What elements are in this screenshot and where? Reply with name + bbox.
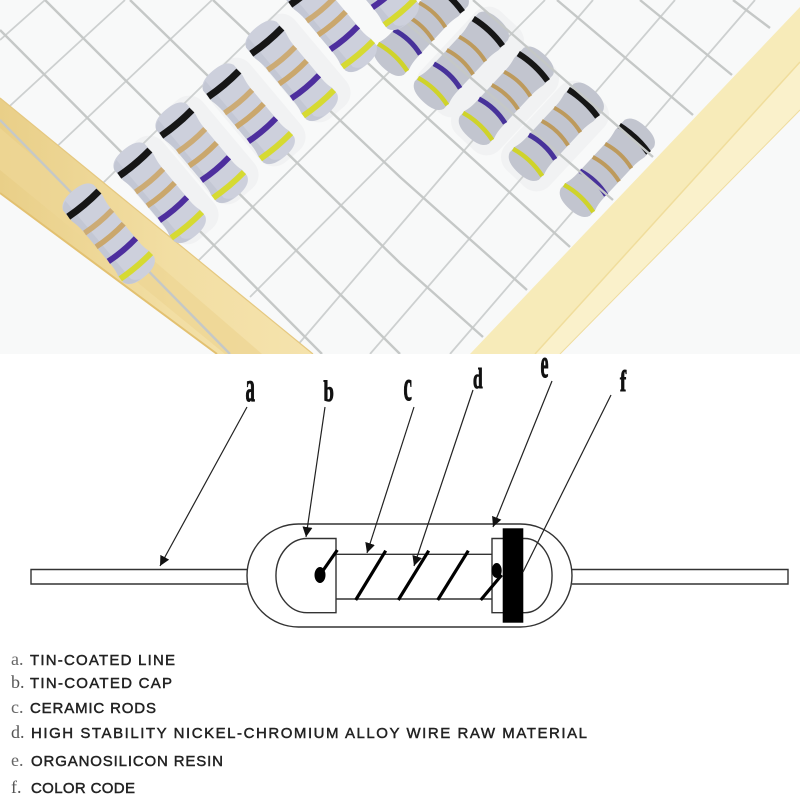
right tin-coated cap — [492, 538, 552, 613]
label c: c — [404, 364, 412, 410]
right masking tape — [470, 7, 800, 354]
legend item d: d. — [11, 722, 24, 742]
legend item b: b. — [11, 672, 24, 692]
legend — [11, 649, 587, 797]
legend item c: CERAMIC RODS — [30, 700, 156, 717]
wire solder point left — [314, 567, 326, 583]
legend item a: a. — [11, 649, 24, 669]
legend item b: TIN-COATED CAP — [30, 675, 172, 692]
color code band (f) — [503, 528, 523, 623]
legend item f: f. — [11, 777, 22, 797]
arrow a — [160, 407, 247, 566]
label b: b — [324, 376, 334, 408]
left-row resistor 4 — [202, 64, 295, 164]
arrow e — [493, 381, 552, 527]
left masking tape — [0, 98, 313, 354]
panel: product photo of resistors on wire grid — [0, 0, 800, 354]
legend item a: TIN-COATED LINE — [30, 652, 175, 669]
right-row resistor 1 — [374, 0, 469, 76]
diagram letter labels — [246, 341, 627, 411]
left lead wire (a) — [31, 570, 247, 584]
right lead wire — [572, 570, 788, 584]
panel: resistor cross-section diagram — [31, 381, 788, 627]
left-row resistor 5 — [246, 20, 338, 122]
right-row resistor 5 — [560, 118, 655, 217]
outer resin capsule (e) — [247, 524, 572, 627]
arrow d — [414, 390, 473, 566]
left-row resistor 7 — [366, 0, 419, 30]
arrow f — [523, 395, 611, 572]
left-row resistor 3 — [155, 102, 248, 203]
label f: f — [620, 366, 627, 398]
legend item e: ORGANOSILICON RESIN — [31, 753, 223, 770]
arrow b — [306, 407, 325, 537]
right-row resistor 4 — [508, 82, 604, 181]
right-row resistor 3 — [458, 46, 554, 145]
legend item e: e. — [11, 750, 24, 770]
legend item f: COLOR CODE — [31, 780, 135, 797]
legend item d: HIGH STABILITY NICKEL-CHROMIUM ALLOY WIRE RAW MATERIAL — [31, 725, 587, 742]
alloy wire windings (d) — [322, 550, 502, 600]
right-row resistor 2 — [414, 12, 509, 110]
left-row resistor 2 — [113, 142, 206, 244]
ceramic rod (c) — [336, 554, 492, 599]
left-row resistor 1 — [62, 183, 155, 284]
wire solder point right — [492, 563, 502, 578]
label d: d — [473, 364, 483, 395]
arrow c — [367, 407, 414, 553]
left-row resistor 6 — [286, 0, 377, 72]
left tin-coated cap (b) — [276, 538, 336, 613]
label e: e — [540, 341, 548, 386]
label a: a — [246, 365, 255, 411]
legend item c: c. — [11, 697, 24, 717]
